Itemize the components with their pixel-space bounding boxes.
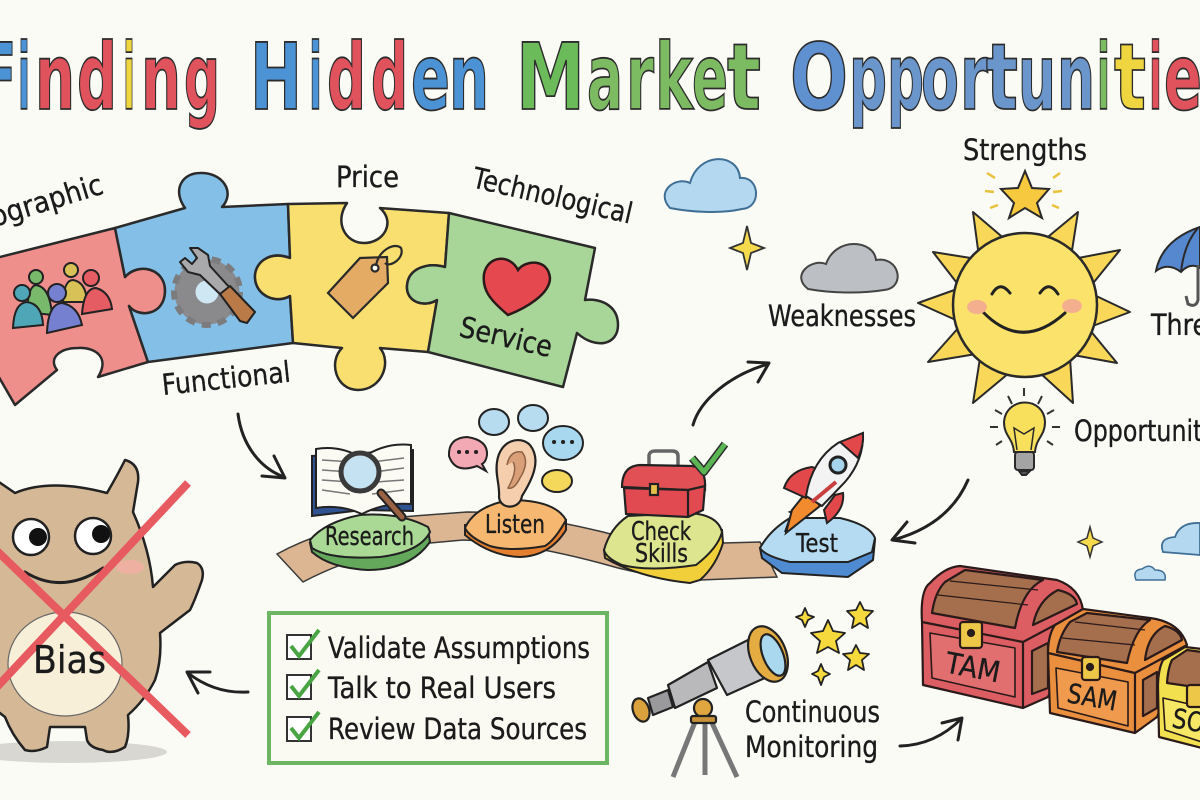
title: d bbox=[77, 24, 117, 131]
chest: SAM bbox=[1048, 609, 1187, 733]
title: n bbox=[449, 24, 489, 131]
stage: research bbox=[310, 445, 430, 570]
panel: checklist bbox=[269, 613, 607, 763]
title: e bbox=[411, 24, 450, 131]
chest: SOM bbox=[1158, 647, 1200, 748]
title: g bbox=[184, 24, 220, 131]
icon: heart bbox=[484, 259, 550, 315]
label: technological: Technological bbox=[469, 161, 636, 230]
icon: rocket bbox=[784, 433, 863, 533]
sun face bbox=[953, 233, 1097, 377]
panel: bias monster bbox=[0, 460, 203, 752]
label: continuous monitoring: Continuous bbox=[745, 695, 880, 729]
monster body bbox=[0, 460, 203, 752]
puzzle piece: blue functional bbox=[115, 173, 293, 362]
icon: price tag bbox=[328, 246, 402, 318]
arrow: functional to research bbox=[238, 414, 285, 478]
icon: sparkle bbox=[730, 226, 764, 270]
title: a bbox=[587, 24, 623, 131]
chest: TAM bbox=[922, 566, 1083, 708]
label: bias: Bias bbox=[33, 638, 106, 682]
stage: listen: Listen bbox=[485, 510, 545, 540]
arrow: monitoring to chests bbox=[900, 718, 962, 746]
puzzle piece: green service bbox=[407, 213, 618, 387]
sun rays bbox=[918, 212, 1130, 403]
stage: research: Research bbox=[325, 522, 414, 552]
title: i bbox=[1097, 24, 1110, 131]
title: t bbox=[986, 24, 1018, 131]
skills platform bbox=[604, 530, 723, 583]
label: strengths: Strengths bbox=[963, 133, 1087, 167]
icon: light bulb bbox=[990, 388, 1060, 475]
label: functional: Functional bbox=[160, 355, 292, 402]
label: price: Price bbox=[336, 160, 399, 194]
title: n bbox=[1057, 24, 1095, 131]
title: o bbox=[921, 24, 959, 131]
shadow: monster bbox=[0, 741, 167, 763]
title: i bbox=[1149, 24, 1162, 131]
icon: sparkle small bbox=[1078, 527, 1102, 557]
stage: check skills: Check bbox=[631, 517, 691, 547]
title: i bbox=[123, 24, 135, 131]
icon: open book bbox=[312, 445, 413, 516]
checklist item 3: Review Data Sources bbox=[328, 712, 587, 746]
title: H bbox=[250, 24, 302, 131]
icon: telescope bbox=[629, 620, 796, 777]
label: monitoring: Monitoring bbox=[745, 730, 878, 764]
chest: TAM: TAM bbox=[942, 645, 1003, 689]
puzzle piece: yellow price bbox=[255, 203, 449, 390]
monster smile bbox=[25, 568, 103, 583]
title: t bbox=[727, 24, 761, 131]
label: weaknesses: Weaknesses bbox=[768, 299, 916, 333]
title: p bbox=[849, 24, 887, 131]
arrow: checklist to bias bbox=[187, 672, 248, 693]
orange platform bbox=[465, 520, 566, 557]
icon: cloud small right bbox=[1162, 523, 1200, 555]
arrow: test to weaknesses bbox=[693, 362, 769, 425]
title: u bbox=[1018, 24, 1056, 131]
title: t bbox=[1114, 24, 1146, 131]
stage: check skills bbox=[604, 444, 725, 583]
icon: toolbox bbox=[622, 451, 705, 517]
title: i bbox=[309, 24, 322, 131]
test platform bbox=[760, 540, 875, 577]
title: r bbox=[626, 24, 654, 131]
icon: speech bubbles bbox=[449, 405, 583, 492]
monster belly bbox=[8, 612, 122, 716]
path: road bbox=[277, 512, 777, 582]
title: O bbox=[790, 24, 848, 131]
checklist item 2: Talk to Real Users bbox=[327, 671, 556, 705]
icon: blue cloud bbox=[665, 159, 756, 212]
stage: test bbox=[760, 433, 875, 577]
title: n bbox=[35, 24, 75, 131]
title bbox=[0, 24, 1200, 131]
panel: SWOT sun bbox=[918, 212, 1130, 403]
icon: star bbox=[985, 171, 1062, 218]
monster eyes bbox=[13, 518, 111, 555]
puzzle piece: red demographic bbox=[0, 228, 165, 405]
label: service: Service bbox=[456, 310, 556, 364]
arrow: opportunities to test bbox=[892, 480, 968, 543]
chest: SAM: SAM bbox=[1065, 678, 1119, 718]
title: d bbox=[327, 24, 366, 131]
title: M bbox=[516, 24, 585, 131]
icon: gear and wrench bbox=[174, 248, 255, 325]
monster cheek bbox=[116, 560, 144, 574]
icon: check mark bbox=[692, 444, 725, 472]
title: d bbox=[371, 24, 408, 131]
title: p bbox=[887, 24, 924, 131]
title: n bbox=[141, 24, 181, 131]
icon: stars bbox=[796, 602, 873, 685]
title: i bbox=[18, 24, 30, 131]
icon: ear bbox=[497, 440, 535, 507]
icon: magnifier bbox=[341, 453, 402, 517]
stage: listen bbox=[449, 405, 583, 557]
icon: cloud tiny bbox=[1135, 566, 1165, 580]
research platform bbox=[310, 530, 430, 570]
stage: check skills: Skills bbox=[635, 539, 688, 569]
icon: umbrella bbox=[1156, 227, 1200, 305]
icon: grey cloud bbox=[801, 244, 898, 293]
title: k bbox=[655, 24, 694, 131]
title: e bbox=[692, 24, 728, 131]
panel: puzzle bbox=[0, 173, 618, 405]
icon: people bbox=[13, 263, 112, 333]
red X bbox=[0, 483, 188, 735]
title: r bbox=[960, 24, 988, 131]
checklist item 1: Validate Assumptions bbox=[328, 631, 590, 665]
stage: test: Test bbox=[795, 529, 838, 559]
